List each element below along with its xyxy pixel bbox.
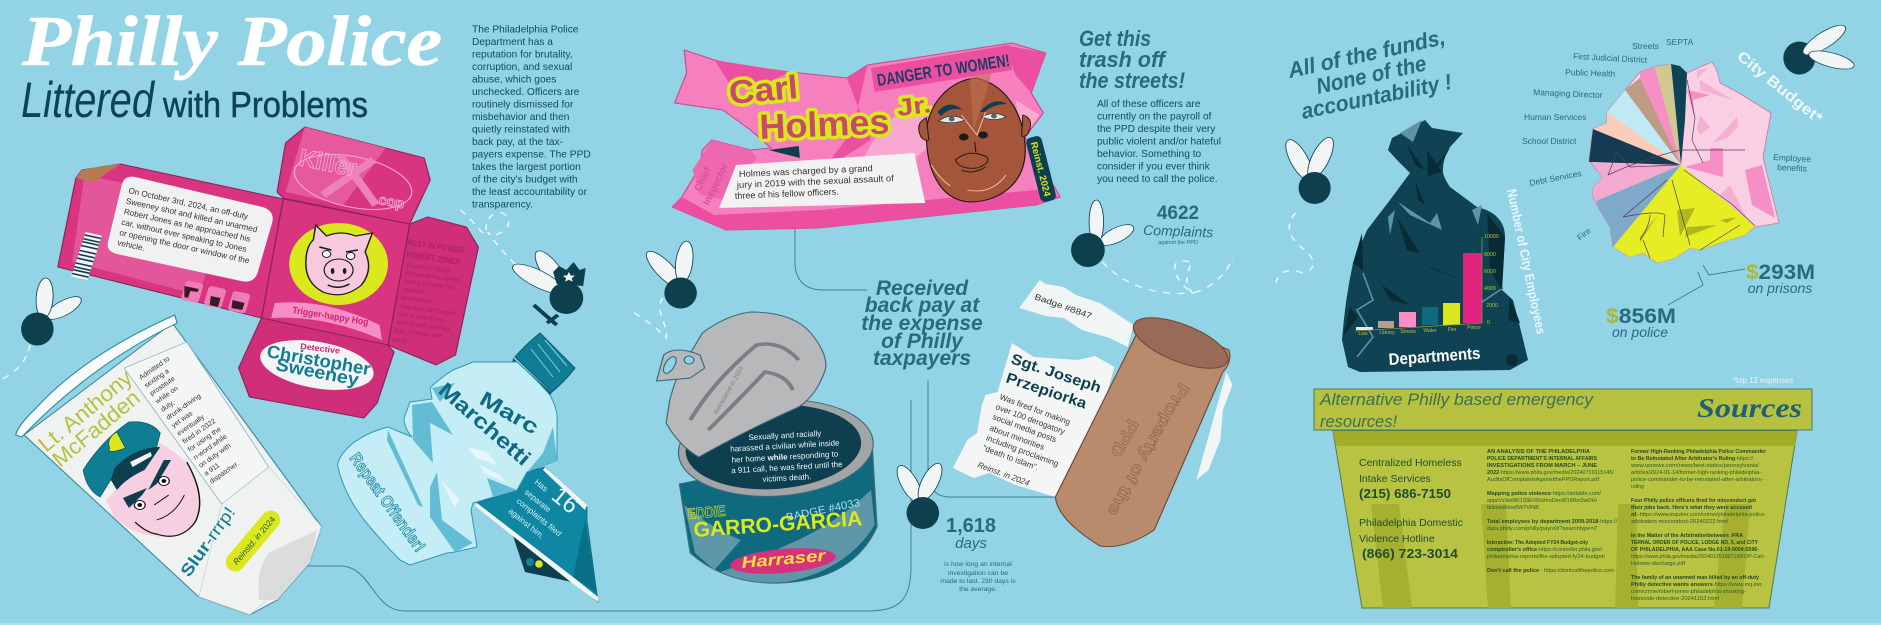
bottle body — [338, 362, 557, 565]
can label: name — [687, 497, 863, 572]
sources column 2: Holmes-discharge.pdf — [1631, 561, 1686, 567]
heading: received back pay: Received — [876, 277, 969, 300]
paper patches — [1685, 90, 1775, 218]
intro text: reputation for brutality, — [472, 50, 573, 60]
body text: officers on payroll: public violent and/or hateful — [1097, 136, 1221, 148]
intro text: payers expense. The PPD — [472, 150, 591, 160]
bite mark — [76, 164, 121, 182]
hotlines: Centralized Homeless — [1359, 457, 1462, 469]
cup story text — [138, 356, 240, 486]
bar chart — [1355, 234, 1499, 337]
sources column 2: articles/2024-01-14/former-high-ranking-philadelphia- — [1631, 470, 1761, 476]
dashed fly trails — [0, 210, 1313, 380]
sources column 1: Interactive: The Adopted FY24 Budget-city — [1487, 540, 1588, 546]
sources column 2: homicide-detective-20241153.html — [1631, 596, 1719, 602]
sources column 2: arbitration-misconduct-20240222.html — [1631, 519, 1728, 525]
intro text: takes the largest portion — [472, 162, 581, 173]
bar chart: 4000 — [1484, 286, 1496, 292]
heading: all of the funds — [1285, 24, 1454, 124]
pie labels: School District — [1522, 136, 1577, 146]
bin lid — [1314, 389, 1812, 430]
danger banner — [871, 45, 1012, 92]
sources heading: Sources — [1697, 393, 1802, 423]
bar chart: Fire — [1448, 327, 1457, 333]
bar chart: Water — [1423, 328, 1437, 334]
pie labels — [1522, 37, 1811, 243]
memorial text: REST IN POWER — [407, 237, 465, 255]
bottle name: Marchetti — [434, 378, 535, 471]
stat: 1,618 days: investigation can be — [948, 570, 1008, 577]
slur-rrrp slogan: Slur-rrrp! — [177, 503, 239, 580]
alternative resources heading: Alternative Philly based emergency — [1319, 391, 1595, 409]
memorial text: was a 54-year old — [403, 278, 455, 292]
note scraps: Joseph Przepiorka: Przepiorka — [1004, 370, 1089, 413]
can label: name: GARRO-GARCIA — [693, 507, 863, 542]
bottle label text: separate — [523, 488, 553, 514]
sources column 1: Don't call the police - https://dontcallthepolice.com — [1487, 568, 1615, 574]
pig mascot — [289, 223, 388, 305]
sources column 2: ruling — [1631, 484, 1644, 490]
memorial text: ROBERT JONES — [406, 249, 461, 267]
hotlines: (215) 686-7150 — [1359, 486, 1451, 501]
cup story text: on duty with — [198, 443, 233, 470]
footnote: *top 12 expenses — [1733, 376, 1793, 385]
alternative resources heading — [1319, 391, 1595, 431]
story card — [108, 177, 273, 282]
story text: car, without ever speaking to Jones — [121, 218, 247, 254]
ribbon text: Trigger-happy Hog — [292, 305, 369, 328]
heading: all of the funds: All of the funds, — [1285, 24, 1447, 83]
bar chart: Streets — [1400, 329, 1416, 335]
can rim — [674, 393, 878, 503]
sources column 1: POLICE DEPARTMENT'S INTERNAL AFFAIRS — [1487, 456, 1597, 462]
intro text: routinely dismissed for — [472, 100, 574, 110]
body text: officers on payroll: you need to call the police. — [1097, 174, 1218, 185]
tear shadow — [769, 146, 800, 158]
sources column 2: Former High-Ranking Philadelphia Police Commander — [1631, 449, 1766, 455]
heading: get this trash off the streets: Get this — [1079, 26, 1151, 51]
stat: $856M on police: on police — [1612, 324, 1668, 340]
intro text: abuse, which goes — [472, 74, 556, 86]
bar chart: 2000 — [1486, 303, 1498, 309]
stat: $293M on prisons: on prisons — [1748, 280, 1812, 296]
can lid — [657, 312, 826, 457]
cup story text: drunk-driving — [165, 393, 203, 422]
sources column 2: The family of an unarmed man killed by an off-duty — [1631, 575, 1759, 581]
bottle label text: complaints filed — [515, 497, 563, 538]
reinstated pill: Reinstd. in 2024 — [231, 514, 277, 567]
cup story text: sexting a — [144, 368, 171, 390]
memorial text — [391, 237, 465, 345]
can body — [679, 445, 877, 583]
sources column 2: police-commander-to-be-reinstated-after-arbitrators- — [1631, 477, 1763, 483]
note scraps: Joseph Przepiorka: social media posts — [991, 412, 1058, 444]
toilet paper roll: PPD — [1106, 416, 1142, 460]
chart axis title: Departments: Departments — [1388, 345, 1481, 369]
barcode — [71, 232, 102, 280]
box top flap — [277, 127, 430, 224]
sources column 1: Mapping police violence -https://airtable.com/ — [1487, 491, 1602, 497]
baton — [534, 305, 558, 325]
fly 4 — [1071, 200, 1138, 267]
Holmes story text: jury in 2019 with the sexual assault of — [736, 173, 894, 190]
pie labels: Fire — [1575, 225, 1593, 243]
stat: $293M on prisons: $293M — [1746, 261, 1815, 284]
note scraps: Joseph Przepiorka: about minorities — [988, 423, 1046, 452]
cup story text: for using the — [187, 426, 223, 454]
name on box: Detective — [300, 341, 341, 356]
note scraps: Joseph Przepiorka: Badge #8847 — [1033, 291, 1094, 321]
fly 1 — [21, 278, 85, 346]
subtitle — [21, 72, 368, 128]
note scraps: Joseph Przepiorka — [953, 280, 1134, 500]
tuna can: Eddie Garro-Garcia — [657, 312, 878, 583]
fly 5 — [892, 461, 947, 529]
crossed logo — [287, 145, 419, 219]
cup name: Lt. Anthony — [33, 365, 137, 457]
bottle neck and cap — [512, 333, 575, 397]
sources column 2: TERNAL ORDER OF POLICE, LODGE NO. 5, and CITY — [1631, 540, 1758, 546]
officer portrait — [83, 422, 200, 537]
paper base — [1589, 62, 1779, 263]
bottle label text: against him. — [507, 507, 546, 541]
fly 7 — [1783, 21, 1857, 75]
sources column 2: Philly detective wants answers -https://www.inq.irer. — [1631, 582, 1763, 588]
name oval — [254, 332, 380, 398]
sources column 1: philadelphia-reports/the-adopted-fy24-budget/ — [1487, 554, 1606, 560]
title: Philly Police — [21, 3, 442, 81]
stat: $856M on police — [1606, 305, 1676, 340]
intro text: unchecked. Officers are — [472, 87, 580, 98]
name: Carl Holmes Jr.: Holmes — [759, 102, 890, 147]
subtitle: with Problems — [162, 84, 368, 125]
intro text: transparency. — [472, 200, 533, 210]
story text: vehicle. — [117, 238, 146, 253]
body text: officers on payroll: consider if you ever think — [1097, 162, 1211, 172]
box left panel — [58, 164, 283, 318]
intro text: of the city's budget with — [472, 174, 578, 186]
title — [21, 3, 442, 128]
intro text: back pay, at the tax- — [472, 137, 563, 148]
bottle label text: 16 — [546, 482, 584, 519]
bar chart: Police — [1467, 325, 1481, 331]
stat: 1,618 days: 1,618 — [946, 515, 996, 537]
box right flap — [388, 217, 478, 365]
hotlines: (866) 723-3014 — [1362, 546, 1459, 561]
can label: name: BADGE #4033 — [785, 497, 861, 524]
bar chart: Law — [1358, 331, 1368, 337]
bin body — [1333, 431, 1797, 608]
stat: 1,618 days: is how long an internal — [944, 561, 1012, 568]
stat: 1,618 days: the average. — [959, 586, 997, 593]
fly 2: police — [508, 247, 586, 325]
can story text: a 911 call, he was fired until the — [731, 460, 843, 475]
body text: officers on payroll: behavior. Something to — [1097, 149, 1202, 160]
can story text: victims death. — [762, 472, 812, 484]
lid text: Reinstated in 2024 — [713, 365, 745, 416]
body text: officers on payroll — [1097, 99, 1221, 185]
trash bag with bar chart — [1342, 120, 1549, 372]
reinstated tag: Reinst. 2024 — [1028, 141, 1053, 198]
bottle name: Marc — [476, 387, 543, 440]
can contents — [681, 399, 865, 495]
sources column 1 — [1487, 449, 1618, 574]
killer cop logo text — [297, 144, 406, 211]
crease lines — [1608, 80, 1755, 258]
cup story text: while on — [154, 385, 180, 406]
heading: get this trash off the streets: the streets! — [1079, 68, 1185, 93]
cup story text: n-word while — [192, 433, 229, 462]
sources column 2: OF PHILADELPHIA, AAA Case No.01-19-0004-5596- — [1631, 547, 1759, 553]
body text: officers on payroll: All of these officers are — [1097, 99, 1201, 110]
cigarette box: Christopher Sweeney — [58, 127, 478, 418]
cup name: McFadden — [47, 385, 145, 472]
bottle label text — [507, 478, 584, 541]
bar chart: 0 — [1487, 320, 1490, 326]
intro text: corruption, and sexual — [472, 62, 572, 73]
hotlines: Intake Services — [1359, 473, 1431, 485]
sources column 1: AuditsOfComplaintsAgainstthePPDReport.pdf — [1487, 477, 1600, 483]
heading: received back pay: taxpayers — [873, 347, 971, 370]
note scraps: Joseph Przepiorka: "death to islam". — [981, 443, 1040, 472]
heading: received back pay: the expense — [861, 312, 983, 335]
rank label: Inspector — [701, 162, 731, 207]
story text: Sweeney shot and killed an unarmed — [125, 197, 259, 234]
pie labels: Employee — [1773, 152, 1811, 164]
sources column 2: Four Philly police officers fired for misconduct got — [1631, 498, 1756, 504]
intro text: misbehavior and then — [472, 112, 569, 123]
intro text: the least accountability or — [472, 187, 588, 198]
bin band — [1333, 431, 1797, 446]
hotlines — [1359, 457, 1463, 561]
toilet paper roll — [1055, 307, 1237, 547]
intro text — [472, 24, 591, 210]
killer cop logo text: cop — [377, 191, 406, 211]
stat: 4622 complaints: Complaints — [1143, 222, 1213, 240]
note scraps: Joseph Przepiorka: Reinst. in 2024 — [976, 460, 1031, 488]
flies — [21, 21, 1857, 529]
bottle name — [434, 378, 543, 471]
Holmes story text — [735, 163, 894, 201]
heading: all of the funds: None of the — [1314, 51, 1428, 99]
name on box: Christopher — [265, 341, 372, 379]
stat: 1,618 days: made to last. 230 days is — [940, 578, 1016, 585]
repeat offender: Repeat Offender! — [346, 449, 429, 556]
cup story text: fired in 2022 — [182, 418, 217, 446]
ribbon — [271, 302, 382, 340]
stat: $856M on police: $856M — [1606, 305, 1676, 328]
cup story text: dispatcher. — [209, 461, 240, 486]
hotlines: Violence Hotline — [1359, 533, 1435, 545]
note scraps: Joseph Przepiorka: Was fired for making — [998, 392, 1072, 427]
box front panel — [261, 199, 410, 345]
intro text: quietly reinstated with — [472, 124, 570, 136]
pie labels: Debt Services — [1528, 168, 1582, 188]
pie labels: Public Health — [1565, 67, 1616, 79]
rank label: Chief — [693, 165, 714, 193]
stat: 4622 complaints — [1143, 203, 1213, 246]
bar chart: 6000 — [1484, 269, 1496, 275]
reinstated tag — [1025, 135, 1057, 203]
bag shadows — [1343, 145, 1520, 337]
name: Carl Holmes Jr.: Carl — [727, 68, 799, 111]
sources column 2: their jobs back. Here's what they were accused — [1631, 505, 1752, 511]
sources column 2: to Be Reinstated After Arbitrator's Ruling-https:// — [1631, 456, 1754, 462]
sources column 2: In the Matter of the Arbitrationbetween :FRA — [1631, 533, 1743, 539]
bottle folds — [387, 383, 557, 552]
bar chart: 10000 — [1484, 234, 1499, 240]
memorial text: operator, an Eagles — [400, 303, 456, 317]
sources column 1: 2022-https://www.phila.gov/media/20240719115145/ — [1487, 470, 1615, 476]
bottle label — [475, 467, 598, 602]
connector lines — [303, 227, 1745, 611]
pie slices — [1613, 165, 1755, 263]
name on box: Sweeney — [274, 354, 361, 390]
bar chart: Library — [1379, 330, 1395, 336]
story text: On October 3rd, 2024, an off-duty — [128, 186, 250, 221]
sources column 1: AN ANALYSIS OF THE PHILADELPHIA — [1487, 449, 1590, 455]
harraser pill — [729, 544, 837, 578]
story text: Robert Jones as he approached his — [123, 207, 251, 244]
cup story text: yet was — [171, 410, 195, 430]
cup story text: Admitted to — [138, 356, 171, 382]
name: Carl Holmes Jr.: Jr. — [896, 91, 932, 122]
Holmes story text: three of his fellow officers. — [735, 186, 839, 201]
danger text: DANGER TO WOMEN! — [876, 51, 1011, 90]
can label: name: Harraser — [741, 548, 827, 572]
story text: or opening the door or window of the — [119, 228, 251, 266]
note scraps: Joseph Przepiorka: over 100 derogatory — [994, 402, 1067, 437]
cup story text: a 911 — [203, 462, 221, 478]
sources column 1: tblxxesKbw8W7VlNB — [1487, 505, 1539, 511]
cup body — [24, 323, 322, 615]
memorial text: assistance — [401, 294, 432, 305]
sources column 1: Total employees by department 2009-2018 -https:// — [1487, 519, 1618, 525]
pie labels: Streets — [1632, 41, 1659, 51]
memorial text: uncle. — [391, 336, 409, 345]
can label: name: EDDIE — [687, 503, 726, 523]
fly 6 — [1280, 135, 1339, 204]
warning icons — [181, 280, 251, 314]
stat: $293M on prisons — [1746, 261, 1815, 296]
Holmes story text: Holmes was charged by a grand — [739, 163, 873, 179]
heading: get this trash off the streets — [1079, 26, 1185, 93]
pie title: City Budget* — [1733, 48, 1826, 127]
bottle: Marc Marchetti — [338, 333, 598, 602]
heading: all of the funds: accountability ! — [1299, 69, 1454, 124]
name: Carl Holmes Jr. — [727, 68, 932, 147]
heading: get this trash off the streets: trash off — [1079, 47, 1168, 72]
intro text: Department has a — [472, 37, 553, 48]
pie labels: SEPTA — [1666, 37, 1694, 47]
sources column 1: data.philly.com/philly/payroll/?searchtype=2 — [1487, 526, 1597, 532]
pie labels: First Judicial District — [1573, 51, 1648, 65]
sources column 2: com/crime/robert-jones-philadelphia-shooting- — [1631, 589, 1746, 595]
can story text: Sexually and racially — [748, 429, 822, 442]
subtitle: Littered — [21, 72, 156, 128]
lime shading — [1640, 208, 1737, 242]
note scraps: Joseph Przepiorka: including proclaiming — [985, 433, 1060, 469]
story text — [117, 186, 259, 266]
can story text: harassed a civilian while inside — [730, 438, 840, 454]
chart axis title: employees: Number of City Employees — [1504, 188, 1549, 336]
memorial text: fan, a well-loved — [398, 311, 445, 324]
heading: received back pay: of Philly — [881, 330, 964, 353]
pie labels: benefits — [1777, 162, 1807, 174]
memorial text: and deeply missed — [396, 319, 450, 333]
stat: 4622 complaints: against the PPD — [1158, 240, 1198, 246]
bag shape — [1342, 120, 1528, 372]
memorial text: Raised in South — [406, 262, 452, 275]
sources column 2: https://www.phila.gov/media/20240125190719/FOP-Carl- — [1631, 554, 1765, 560]
sources column 1: comptroller's office-https://controller.phila.gov/ — [1487, 547, 1603, 553]
cup story text: prostitute — [149, 375, 177, 398]
stat: 4622 complaints: 4622 — [1157, 203, 1199, 224]
pie labels: Managing Director — [1533, 87, 1603, 100]
memorial text: Philadelphia, Jones — [405, 270, 461, 284]
memorial text: episode — [402, 286, 426, 296]
box bottom flap — [239, 318, 394, 418]
body text: officers on payroll: currently on the payroll of — [1097, 112, 1212, 122]
killer cop logo text: Killer — [297, 144, 359, 183]
trash bin: resources and sources — [1314, 389, 1812, 608]
stat: 1,618 days: days — [955, 535, 987, 552]
body text: officers on payroll: the PPD despite their very — [1097, 124, 1216, 135]
toilet paper roll: Property of the — [1104, 380, 1193, 519]
can story text: her home while responding to — [731, 449, 839, 465]
cup story text: duty, — [160, 399, 176, 414]
reinstated pill — [222, 507, 284, 575]
pie labels: Human Services — [1524, 112, 1586, 122]
cup: Anthony McFadden — [16, 315, 322, 615]
sources column 1: appzVzSeiNK1S5EVR/shroDenW19Rm3wOH/ — [1487, 498, 1598, 504]
sources column 1: INVESTIGATIONS FROM MARCH – JUNE — [1487, 463, 1598, 469]
bag highlights — [1388, 120, 1482, 235]
bottle label text: Has — [533, 478, 549, 494]
cup story text: eventually — [176, 414, 206, 438]
hotlines: Philadelphia Domestic — [1359, 517, 1463, 529]
bar chart: 8000 — [1484, 252, 1496, 258]
sources column 2 — [1631, 449, 1766, 602]
can story text — [730, 429, 843, 484]
story card — [719, 153, 925, 208]
alternative resources heading: resources! — [1320, 413, 1397, 431]
fly 3 — [641, 240, 697, 308]
cup rim — [16, 315, 177, 437]
candy wrapper: Carl Holmes Jr. — [672, 43, 1060, 230]
cup side text panel — [124, 342, 269, 504]
crumpled paper pie chart — [1522, 37, 1826, 263]
memorial text: son, brother, and — [394, 327, 443, 340]
intro text: The Philadelphia Police — [472, 24, 579, 36]
sources column 2: of.-https://www.inquirer.com/crime/philadelphia-police- — [1631, 512, 1766, 518]
note scraps: Joseph Przepiorka: Sgt. Joseph — [1009, 351, 1103, 397]
face: Carl Holmes — [919, 72, 1031, 202]
pull ring — [657, 350, 705, 381]
heading: received back pay: back pay at — [865, 294, 980, 317]
heading: received back pay — [861, 277, 983, 370]
stat: 1,618 days — [940, 515, 1016, 593]
sources column 2: www.usnews.com/news/best-states/pennsylvania/ — [1631, 463, 1760, 469]
